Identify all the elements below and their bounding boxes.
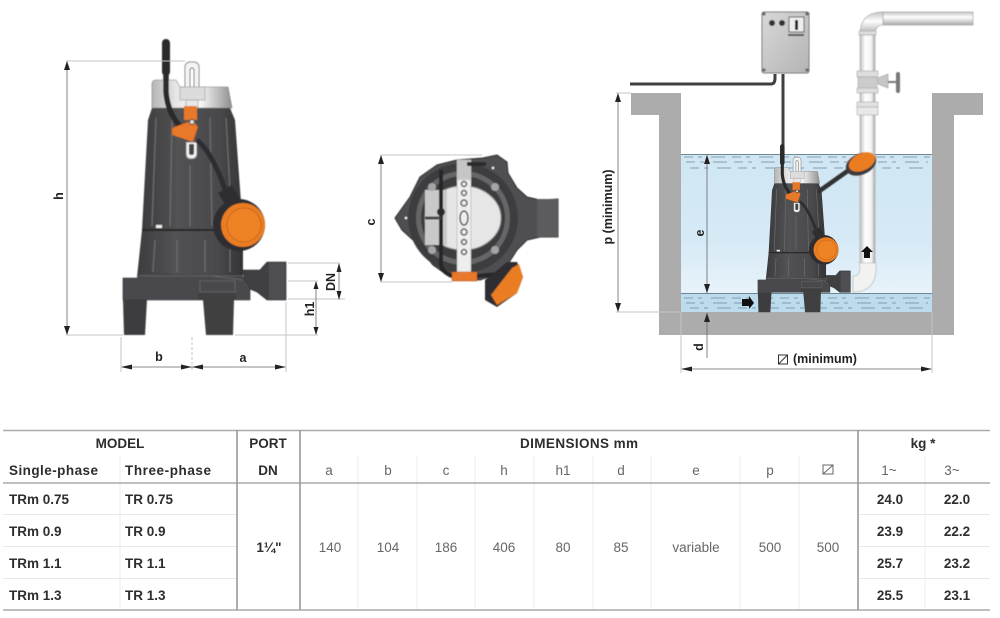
table header: dimensions: b bbox=[384, 463, 392, 478]
dimension lines: top view bbox=[364, 155, 482, 282]
table header: model bbox=[9, 436, 211, 478]
table header: dimensions: c bbox=[443, 463, 450, 478]
table header: dimensions: a bbox=[325, 463, 333, 478]
table header: model: Three-phase bbox=[125, 463, 211, 478]
pump top drawing bbox=[395, 155, 558, 307]
water bbox=[681, 154, 932, 312]
dimension values: variable bbox=[672, 540, 720, 555]
weight values three-phase: 23.2 bbox=[944, 556, 970, 571]
dimension values: 500 bbox=[817, 540, 839, 555]
three-phase models: TR 0.9 bbox=[125, 524, 166, 539]
three-phase models: TR 1.1 bbox=[125, 556, 166, 571]
table header: weight: kg * bbox=[911, 436, 936, 451]
label d: d bbox=[692, 343, 706, 351]
label a: a bbox=[240, 351, 248, 365]
three-phase models bbox=[125, 492, 174, 603]
upper float switch bbox=[818, 148, 880, 192]
dimension values bbox=[319, 540, 839, 555]
pump in well bbox=[758, 146, 850, 312]
single-phase models: TRm 1.1 bbox=[9, 556, 62, 571]
weight values single-phase: 25.5 bbox=[877, 588, 904, 603]
table header: port bbox=[249, 436, 287, 478]
table header: dimensions: e bbox=[692, 463, 700, 478]
table header: weight: 3~ bbox=[944, 463, 960, 478]
single-phase models bbox=[9, 492, 70, 603]
installation diagram in well bbox=[601, 12, 983, 373]
single-phase models: TRm 0.9 bbox=[9, 524, 62, 539]
table header: dimensions: h bbox=[500, 463, 508, 478]
discharge pipe bbox=[853, 12, 973, 292]
table header: weight: 1~ bbox=[881, 463, 897, 478]
dimension values: 80 bbox=[555, 540, 571, 555]
table header: dimensions bbox=[325, 436, 833, 478]
label h: h bbox=[52, 192, 66, 200]
single-phase models: TRm 1.3 bbox=[9, 588, 62, 603]
weight values single-phase: 24.0 bbox=[877, 492, 903, 507]
table header: dimensions: DIMENSIONS mm bbox=[520, 436, 638, 451]
dimension lines: well bbox=[601, 93, 932, 373]
table header: dimensions: d bbox=[617, 463, 625, 478]
table header: dimensions: h1 bbox=[555, 463, 571, 478]
label h1: h1 bbox=[303, 302, 317, 316]
weight values single-phase bbox=[877, 492, 904, 603]
power cables bbox=[630, 74, 783, 146]
label e: e bbox=[693, 229, 707, 236]
weight values three-phase: 23.1 bbox=[944, 588, 971, 603]
pump top view with dimension c bbox=[364, 155, 558, 307]
dimension lines: front view bbox=[52, 61, 345, 372]
label DN: DN bbox=[324, 273, 338, 291]
label c: c bbox=[364, 218, 378, 225]
port value: 1¼" bbox=[256, 540, 282, 555]
dimensions table bbox=[3, 430, 990, 610]
pump front view with dimensions bbox=[52, 43, 345, 372]
three-phase models: TR 0.75 bbox=[125, 492, 174, 507]
dimension values: 500 bbox=[759, 540, 781, 555]
dimension values: 186 bbox=[435, 540, 457, 555]
dimension values: 406 bbox=[493, 540, 515, 555]
table header: dimensions: p bbox=[766, 463, 774, 478]
weight values three-phase bbox=[944, 492, 971, 603]
label b: b bbox=[155, 350, 163, 364]
label square (minimum): (minimum) bbox=[793, 352, 857, 366]
dimension values: 85 bbox=[613, 540, 629, 555]
table rules bbox=[3, 430, 990, 610]
label p (minimum): p (minimum) bbox=[601, 170, 615, 244]
control box bbox=[762, 12, 809, 73]
dimension values: 104 bbox=[377, 540, 400, 555]
table header: port: DN bbox=[258, 463, 278, 478]
dimension values: 140 bbox=[319, 540, 341, 555]
weight values single-phase: 23.9 bbox=[877, 524, 903, 539]
concrete well walls bbox=[631, 93, 983, 335]
flow arrow up bbox=[861, 246, 873, 258]
flow arrow right bbox=[742, 296, 754, 309]
table header: model: MODEL bbox=[96, 436, 144, 451]
pump front drawing bbox=[123, 43, 286, 335]
weight values three-phase: 22.2 bbox=[944, 524, 970, 539]
table header: port: PORT bbox=[249, 436, 287, 451]
table header: model: Single-phase bbox=[9, 463, 98, 478]
table header: weight bbox=[881, 436, 960, 478]
weight values three-phase: 22.0 bbox=[944, 492, 970, 507]
weight values single-phase: 25.7 bbox=[877, 556, 903, 571]
single-phase models: TRm 0.75 bbox=[9, 492, 70, 507]
three-phase models: TR 1.3 bbox=[125, 588, 166, 603]
